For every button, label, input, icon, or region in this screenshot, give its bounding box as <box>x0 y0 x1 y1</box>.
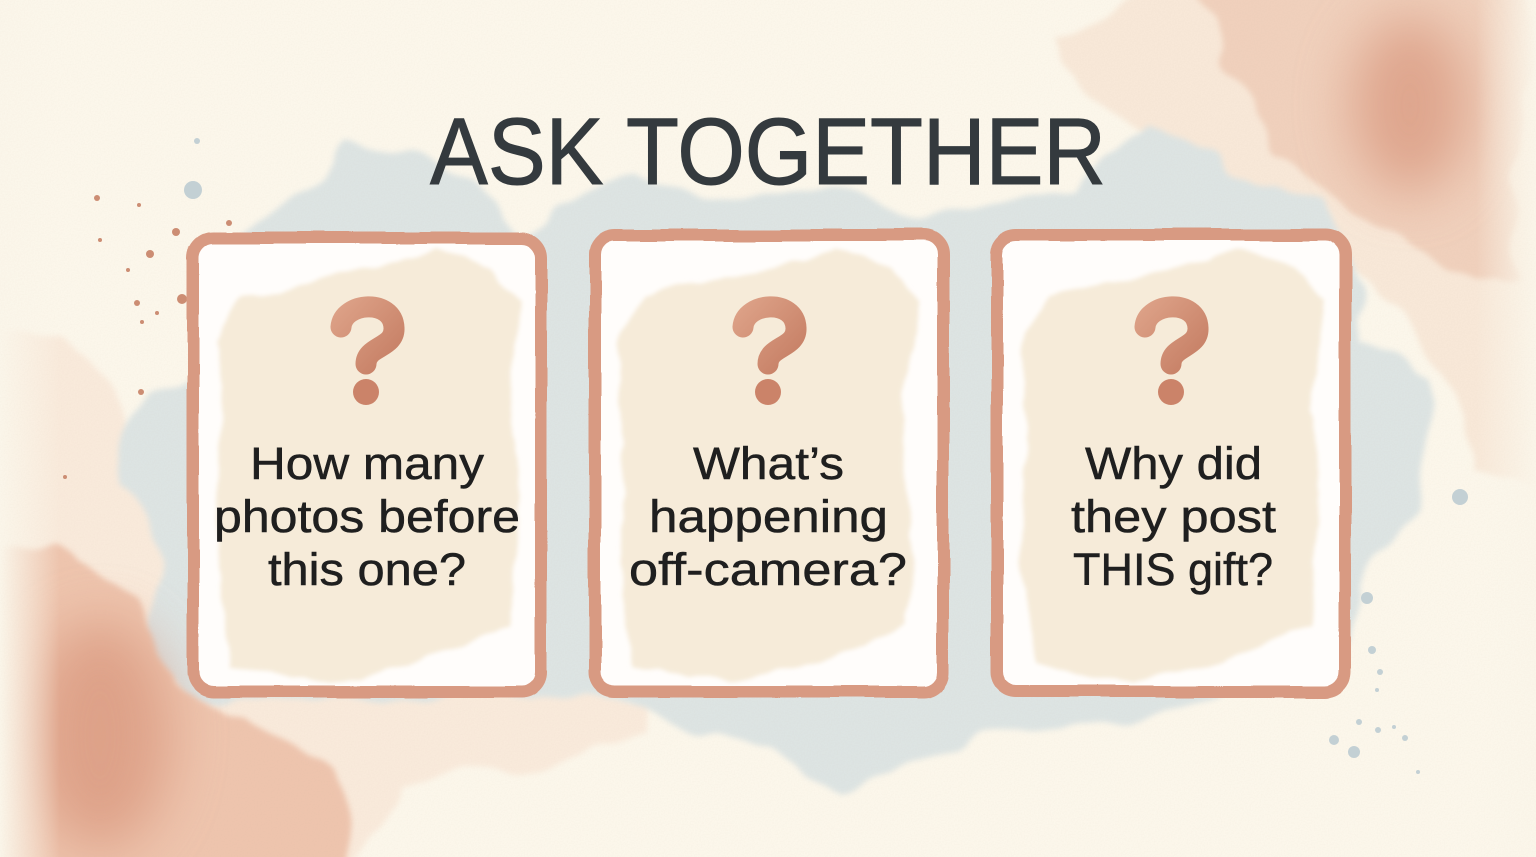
question text: photos before <box>214 491 520 542</box>
question text: they post <box>1071 491 1277 542</box>
question text: Why did <box>1085 438 1262 489</box>
title: ASK TOGETHER <box>430 99 1106 205</box>
question text: this one? <box>268 544 466 595</box>
icon: question mark <box>743 307 796 405</box>
question text: happening <box>649 491 888 542</box>
card 1 <box>193 238 541 692</box>
question text: What’s <box>693 438 844 489</box>
paint wash <box>1021 247 1325 682</box>
paint wash <box>618 247 922 682</box>
question text: How many <box>250 438 485 489</box>
paint splatters <box>63 138 1468 774</box>
question text <box>629 438 907 595</box>
card frame <box>193 238 541 692</box>
paint wash <box>216 247 520 682</box>
icon: question mark <box>341 307 394 405</box>
icon: question mark <box>1145 307 1198 405</box>
card 3 <box>997 235 1345 692</box>
card frame <box>997 235 1345 692</box>
question text: THIS gift? <box>1073 544 1273 595</box>
question text: off-camera? <box>629 544 907 595</box>
question text <box>214 438 520 595</box>
card 2 <box>595 235 943 692</box>
card frame <box>595 235 943 692</box>
question text <box>1071 438 1277 595</box>
